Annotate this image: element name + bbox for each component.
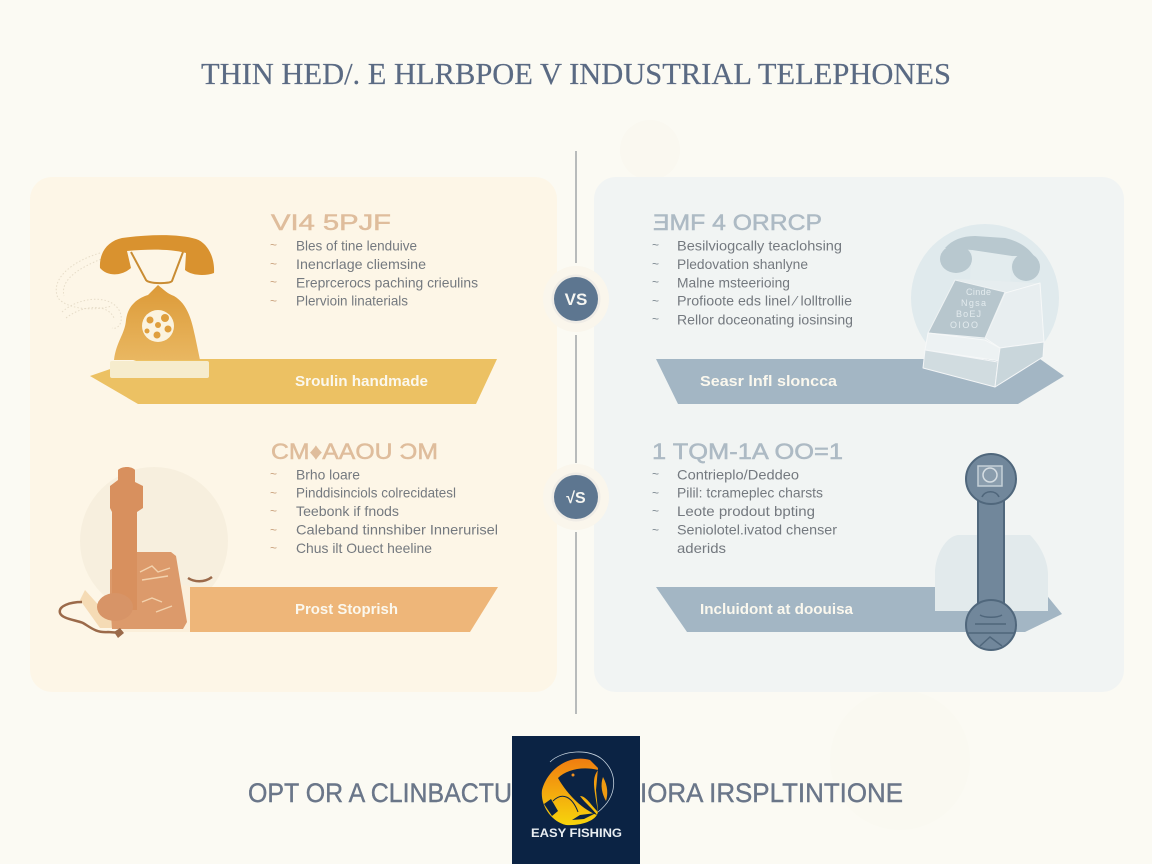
heading: first industrial section: ƎMF 4 ORRCP: [653, 210, 822, 235]
center strip: [557, 151, 594, 714]
list: second handmade section: Brho loare: [296, 466, 360, 482]
badge: VS top: [543, 266, 609, 332]
icon: grey desk telephone: OlOO: [950, 320, 978, 330]
list: second handmade section: ~: [270, 541, 277, 555]
title: THIN HED/. E HLRBPOE V INDUSTRIAL TELEPHONES: [201, 56, 951, 91]
icon: slate vertical handset: [935, 454, 1048, 650]
list: second industrial section: [652, 466, 837, 556]
list: first handmade section: ~: [270, 275, 277, 289]
list: first handmade section: [270, 238, 478, 308]
list: second industrial section: ~: [652, 486, 659, 500]
list: first industrial section: Besilviogcally teaclohsing: [677, 238, 842, 254]
list: second industrial section: aderids: [677, 540, 726, 556]
heading: second industrial section: 1 TQM-1A OO=1: [652, 439, 843, 464]
list: first industrial section: [652, 238, 853, 328]
list: second industrial section: Leote prodout bpting: [677, 503, 815, 519]
icon: golden bell telephone: [56, 235, 214, 378]
banner: handmade: [90, 359, 497, 404]
icon: grey desk telephone: [923, 236, 1044, 387]
list: first handmade section: Plervioin linaterials: [296, 292, 408, 308]
icon: circle behind terracotta telephone: [80, 467, 228, 615]
badge: VS bottom: √S: [566, 490, 586, 507]
list: first industrial section: ~: [652, 238, 659, 252]
badge: VS top: VS: [565, 290, 587, 309]
list: second handmade section: Chus ilt Ouect heeline: [296, 540, 432, 556]
list: second industrial section: ~: [652, 523, 659, 537]
banner: industrial product: [656, 587, 1062, 632]
banner: industrial: [656, 359, 1064, 404]
logo: Easy Fishing: EASY FISHING: [531, 828, 622, 840]
list: second industrial section: Pilil: tcrameplec charsts: [677, 484, 823, 500]
list: second industrial section: ~: [652, 504, 659, 518]
banner: industrial: Seasr lnfl sloncca: [700, 373, 838, 390]
list: second industrial section: Contrieplo/Deddeo: [677, 466, 799, 482]
list: first industrial section: ~: [652, 294, 659, 308]
footer text: OPT OR A CLINBACTU: [248, 778, 512, 808]
divider line: [575, 151, 577, 714]
banner: artisan: [190, 587, 498, 632]
list: first industrial section: ~: [652, 312, 659, 326]
list: second handmade section: Caleband tinnshiber Innerurisel: [296, 522, 498, 538]
badge: VS bottom: [543, 464, 609, 530]
banner: industrial product: Incluidont at doouisa: [700, 601, 854, 618]
list: first handmade section: ~: [270, 294, 277, 308]
icon: grey desk telephone: Ngsa: [961, 298, 986, 308]
list: second industrial section: Seniolotel.ivatod chenser: [677, 522, 837, 538]
icon: grey desk telephone: Cinde: [966, 287, 991, 297]
list: second handmade section: ~: [270, 523, 277, 537]
list: second handmade section: ~: [270, 467, 277, 481]
list: first industrial section: ~: [652, 275, 659, 289]
list: first handmade section: ~: [270, 257, 277, 271]
list: first handmade section: ~: [270, 238, 277, 252]
footer text: IORA IRSPLTINTIONE: [640, 778, 903, 808]
list: second handmade section: ~: [270, 504, 277, 518]
list: first handmade section: Bles of tine lenduive: [296, 238, 417, 254]
heading: first handmade section: VI4 5PJF: [271, 210, 391, 235]
banner: handmade: Sroulin handmade: [295, 373, 428, 390]
list: second industrial section: ~: [652, 467, 659, 481]
banner: artisan: Prost Stoprish: [295, 601, 398, 618]
icon: terracotta upright telephone: [60, 467, 212, 638]
footer text: [248, 778, 903, 808]
list: second handmade section: Pinddisinciols colrecidatesl: [296, 484, 456, 500]
panel: industrial telephones: [594, 177, 1124, 692]
list: second handmade section: ~: [270, 486, 277, 500]
icon: circle behind grey telephone: [911, 224, 1059, 372]
panel: handmade telephones: [30, 177, 557, 692]
list: second handmade section: [270, 466, 498, 556]
heading: second handmade section: CM♦AAOU ƆM: [271, 439, 438, 464]
list: first handmade section: Ereprcerocs paching crieulins: [296, 274, 478, 290]
list: first handmade section: Inencrlage cliemsine: [296, 256, 426, 272]
logo: Easy Fishing: [512, 736, 640, 864]
list: first industrial section: Rellor doceonating iosinsing: [677, 312, 853, 328]
list: first industrial section: Profioote eds linel ⁄ lolltrollie: [677, 292, 852, 308]
list: second handmade section: Teebonk if fnods: [296, 503, 399, 519]
list: first industrial section: Malne msteerioing: [677, 274, 790, 290]
list: first industrial section: Pledovation shanlyne: [677, 256, 808, 272]
list: first industrial section: ~: [652, 257, 659, 271]
icon: grey desk telephone: BoEJ: [956, 309, 981, 319]
